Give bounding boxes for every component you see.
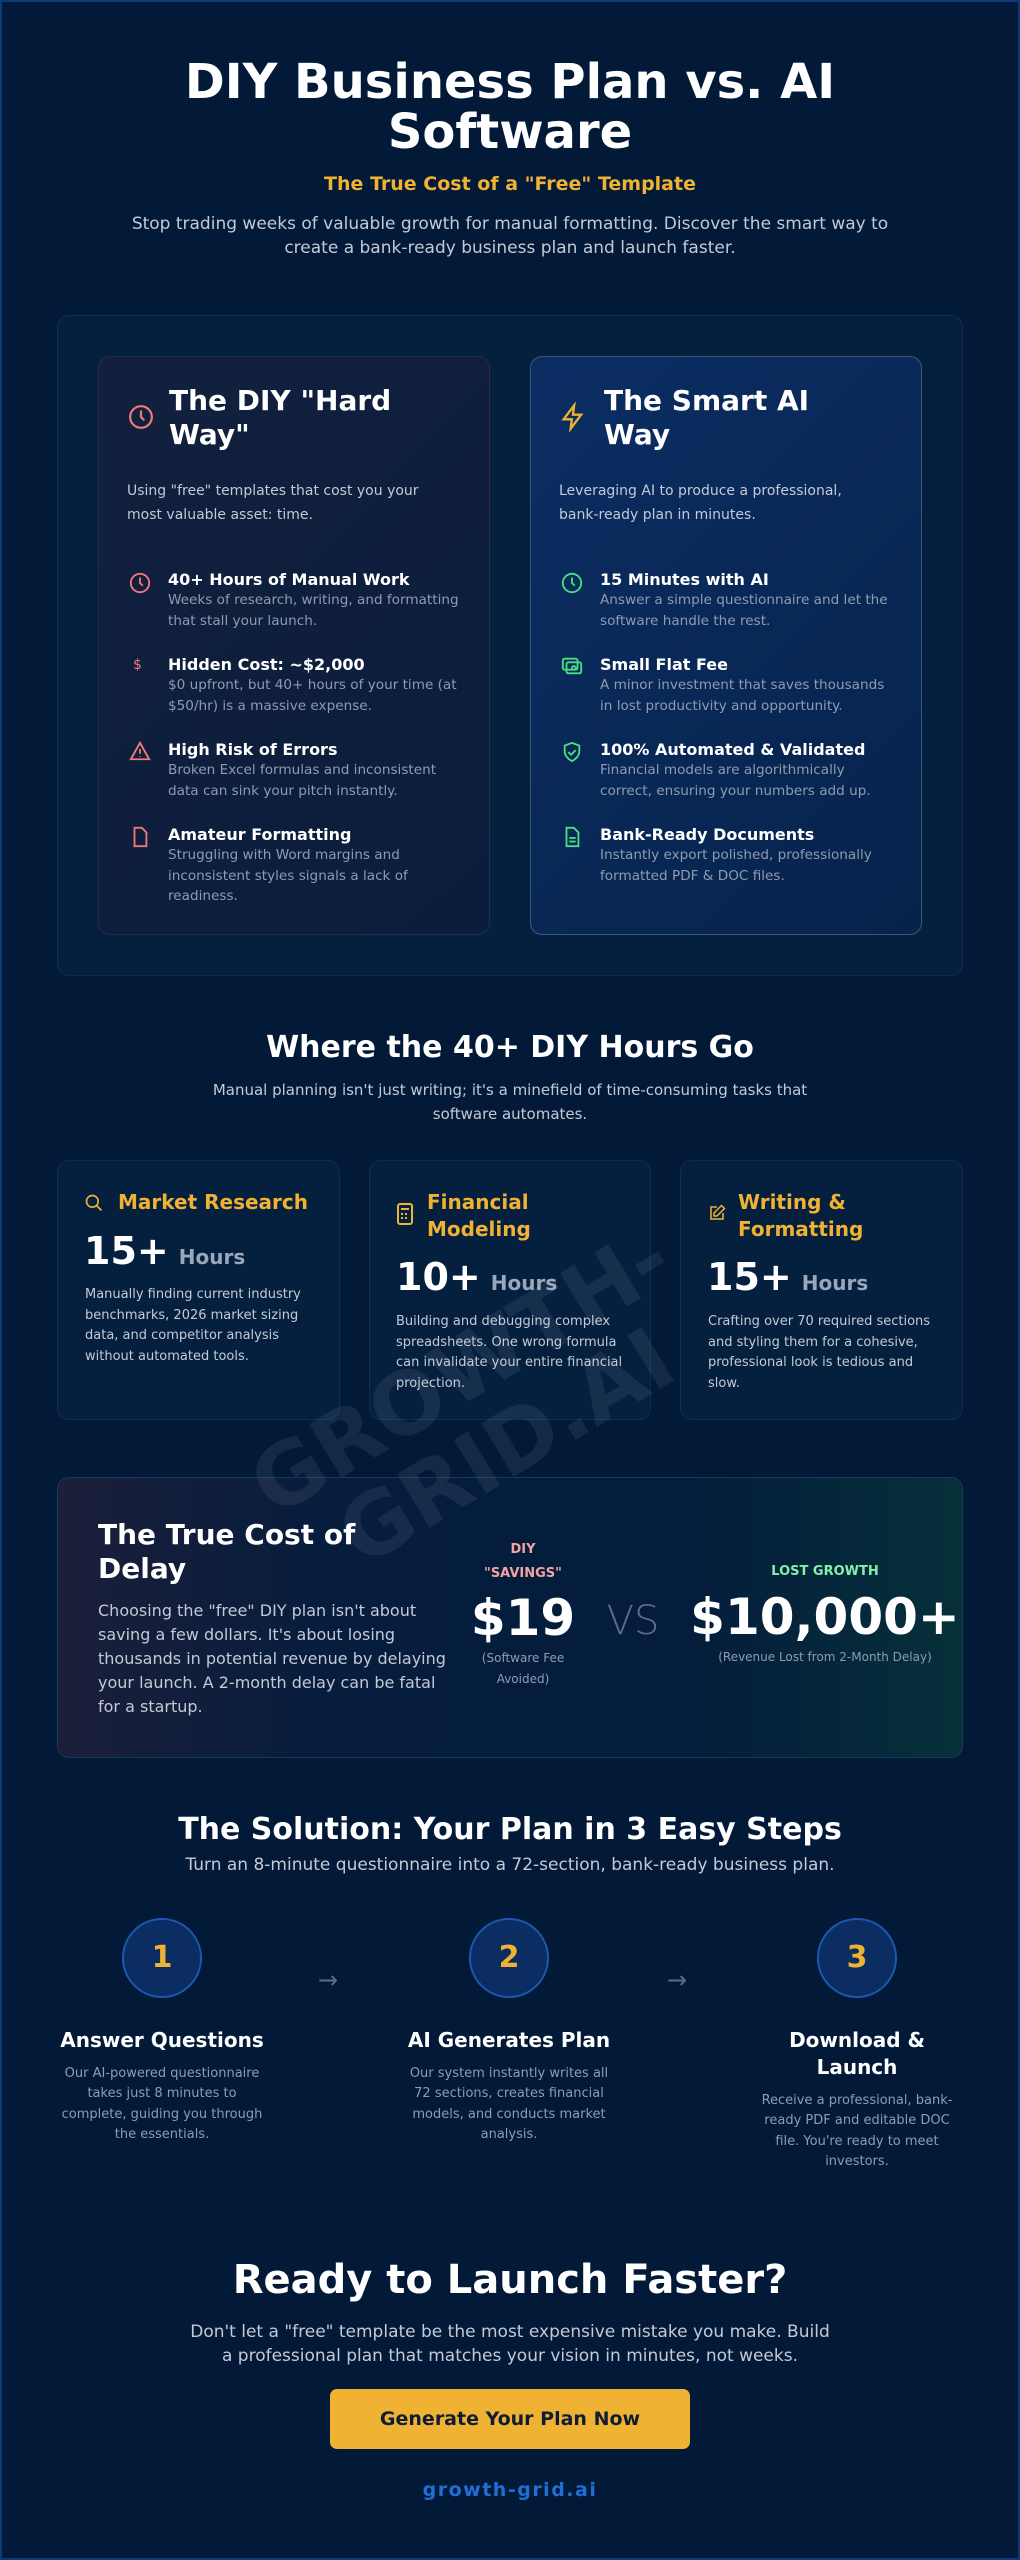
item: automated [564, 740, 871, 798]
heading: The DIY "Hard [169, 384, 391, 417]
panel: comparison [57, 315, 963, 976]
card: financial modeling [369, 1160, 651, 1420]
item: flat fee [562, 655, 884, 714]
stat: lost growth: $10,000+ [690, 1588, 960, 1646]
step 2 text [408, 2028, 610, 2142]
step 3 text: Launch [817, 2055, 897, 2079]
card: writing formatting: Writing & [738, 1190, 846, 1214]
item: manual work: 40+ Hours of Manual Work [168, 570, 409, 589]
item: hidden cost: $0 upfront, but 40+ hours of your time (at $50/hr) is a massive expense. [168, 677, 457, 714]
step 2 text: AI Generates Plan [408, 2028, 610, 2052]
panel: cost of delay [57, 1477, 963, 1758]
stat: lost growth: LOST GROWTH [771, 1564, 879, 1579]
stat: DIY savings: $19 [471, 1589, 575, 1647]
step 2: 2 [499, 1940, 519, 1975]
vs: VS [607, 1598, 659, 1644]
item: flat fee: Small Flat Fee [600, 655, 728, 674]
step 1 [122, 1918, 202, 1998]
step 1 text: Answer Questions [60, 2028, 264, 2052]
arrow 2: → [667, 1966, 687, 1994]
item: hidden cost: Hidden Cost: ~$2,000 [168, 655, 365, 674]
stat: lost growth: (Revenue Lost from 2-Month Delay) [718, 1650, 932, 1664]
card: market research: 15+ Hours [84, 1229, 245, 1273]
card: writing formatting: Crafting over 70 required sections and styling them for a cohesive, professional look is tedious and slow. [708, 1314, 930, 1390]
stat: DIY savings: DIY [510, 1542, 536, 1557]
subtitle: The True Cost of a "Free" Template [324, 173, 696, 195]
subheading: Turn an 8-minute questionnaire into a 72-section, bank-ready business plan. [185, 1855, 835, 1875]
heading: Way [604, 418, 670, 451]
item: documents: Bank-Ready Documents [600, 825, 814, 844]
item: errors [129, 740, 436, 798]
step 1 text [60, 2028, 264, 2142]
stat: DIY savings [471, 1542, 575, 1686]
card: writing formatting: Formatting [738, 1217, 863, 1241]
title: Software [388, 104, 632, 160]
brand url: growth-grid.ai [423, 2479, 597, 2501]
watermark: GROWTH- [233, 1208, 689, 1536]
item: manual work [130, 570, 459, 628]
item: hidden cost: $ [133, 657, 142, 673]
step 3 text: Download & [789, 2028, 925, 2052]
stat: DIY savings: "SAVINGS" [484, 1566, 562, 1581]
heading: The Smart AI [604, 384, 809, 417]
description: Using "free" templates that cost you your most valuable asset: time. [127, 483, 419, 523]
CTA heading: Ready to Launch Faster? [233, 2257, 787, 2303]
heading: where hours go: Where the 40+ DIY Hours Go [266, 1030, 754, 1065]
title [185, 54, 835, 160]
stat: lost growth [690, 1564, 960, 1664]
step 3 text: Receive a professional, bank-ready PDF and editable DOC file. You're ready to meet investors. [762, 2093, 952, 2169]
card: financial modeling: Modeling [427, 1217, 531, 1241]
step 1 text: Our AI-powered questionnaire takes just 8 minutes to complete, guiding you through the essentials. [62, 2066, 262, 2142]
subheading: Manual planning isn't just writing; it's a minefield of time-consuming tasks that software automates. [213, 1081, 807, 1123]
panel: DIY hard way [98, 356, 490, 935]
card: writing formatting: 15+ Hours [707, 1255, 868, 1299]
heading: Delay [98, 1552, 186, 1585]
item: hidden cost [133, 655, 457, 714]
step 3 text [762, 2028, 952, 2169]
card: writing formatting [680, 1160, 963, 1420]
step 3 [817, 1918, 897, 1998]
item: manual work: Weeks of research, writing, and formatting that stall your launch. [168, 592, 459, 628]
arrow 1: → [318, 1966, 338, 1994]
stat: DIY savings: (Software Fee [482, 1651, 564, 1665]
card: market research [57, 1160, 340, 1420]
step 2 [469, 1918, 549, 1998]
item: flat fee: A minor investment that saves thousands in lost productivity and opportunity. [600, 677, 884, 714]
item: formatting: Struggling with Word margins and inconsistent styles signals a lack of readiness. [168, 847, 408, 904]
heading: solution: The Solution: Your Plan in 3 Easy Steps [178, 1812, 842, 1847]
button [330, 2389, 690, 2449]
item: errors: Broken Excel formulas and inconsistent data can sink your pitch instantly. [168, 762, 436, 798]
card: financial modeling: 10+ Hours [396, 1255, 557, 1299]
intro text: Stop trading weeks of valuable growth for manual formatting. Discover the smart way to create a bank-ready business plan and launch faster. [132, 214, 888, 258]
card: market research: Manually finding current industry benchmarks, 2026 market sizing data, and competitor analysis without automated tools. [85, 1287, 301, 1364]
step 3: 3 [847, 1940, 867, 1975]
description: Leveraging AI to produce a professional, bank-ready plan in minutes. [559, 483, 842, 523]
card: financial modeling: Financial [427, 1190, 529, 1214]
stat: DIY savings: Avoided) [497, 1672, 549, 1686]
item: automated: Financial models are algorithmically correct, ensuring your numbers add up. [600, 762, 871, 798]
heading [604, 384, 809, 451]
body text: Choosing the "free" DIY plan isn't about saving a few dollars. It's about losing thousands in potential revenue by delaying your launch. A 2-month delay can be fatal for a startup. [98, 1601, 446, 1716]
heading: The True Cost of [98, 1518, 355, 1551]
heading [169, 384, 391, 451]
heading: Way" [169, 418, 250, 451]
item: 15 minutes [562, 570, 888, 628]
title: DIY Business Plan vs. AI [185, 54, 835, 110]
item: automated: 100% Automated & Validated [600, 740, 865, 759]
CTA text: Don't let a "free" template be the most expensive mistake you make. Build a professional plan that matches your vision in minutes, not weeks. [190, 2322, 830, 2366]
card: financial modeling: Building and debugging complex spreadsheets. One wrong formula can invalidate your entire financial projection. [396, 1314, 622, 1390]
item: 15 minutes: Answer a simple questionnaire and let the software handle the rest. [600, 592, 888, 628]
step 2 text: Our system instantly writes all 72 sections, creates financial models, and conducts market analysis. [410, 2066, 608, 2142]
watermark: GRID.AI [322, 1309, 691, 1586]
header [185, 54, 835, 160]
item: errors: High Risk of Errors [168, 740, 337, 759]
item: formatting: Amateur Formatting [168, 825, 351, 844]
heading [98, 1518, 356, 1585]
icon: clock [129, 405, 153, 429]
card: market research: Market Research [118, 1190, 308, 1214]
item: formatting [134, 825, 408, 904]
item: documents [566, 825, 872, 884]
icon: lightning [561, 402, 584, 432]
step 1: 1 [152, 1940, 172, 1975]
item: documents: Instantly export polished, professionally formatted PDF & DOC files. [600, 847, 872, 884]
item: 15 minutes: 15 Minutes with AI [600, 570, 769, 589]
panel: smart AI way [530, 356, 922, 935]
button: Generate Your Plan Now [380, 2408, 640, 2430]
